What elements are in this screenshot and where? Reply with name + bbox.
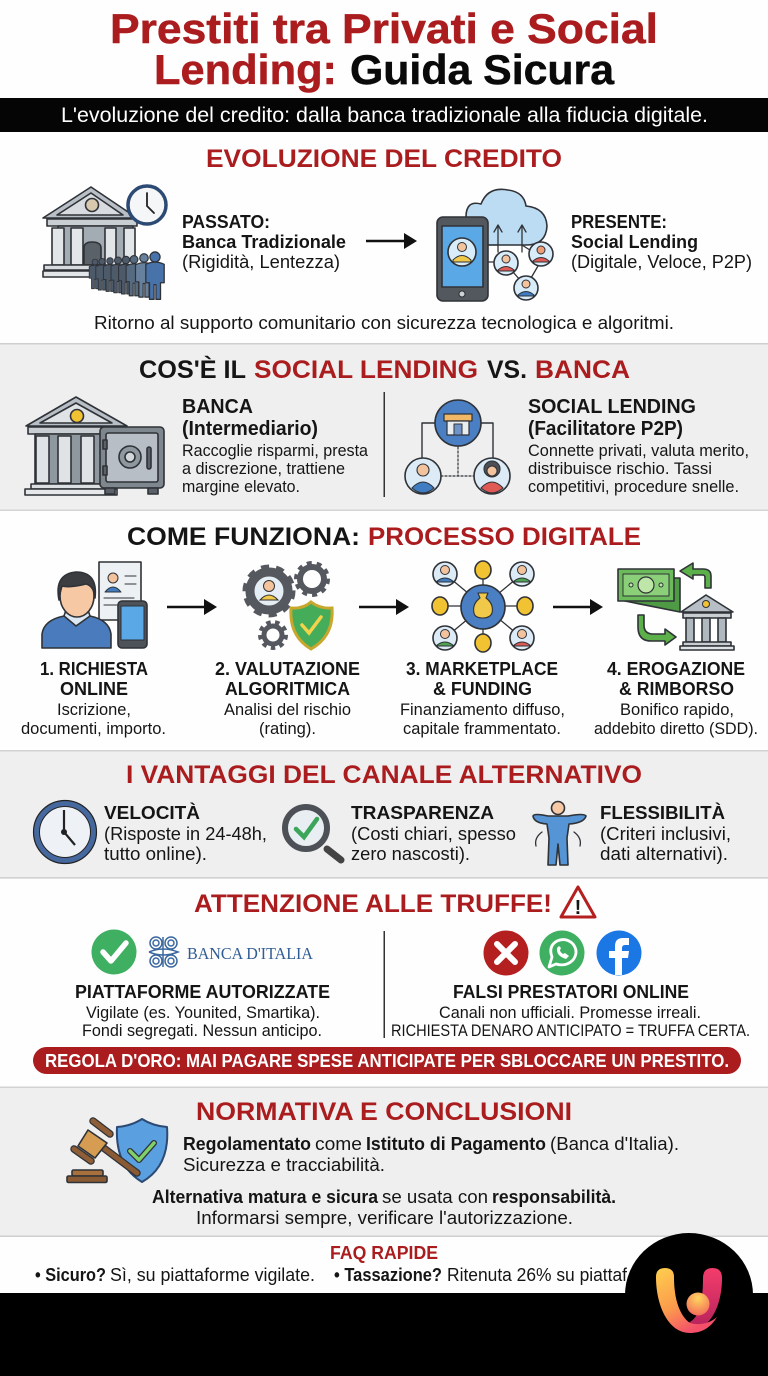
text: step 1: 1. RICHIESTA — [40, 659, 148, 679]
heading: cos'è: BANCA — [535, 356, 630, 384]
text: step 3: Finanziamento diffuso, — [400, 701, 565, 719]
watermark dome — [625, 1233, 753, 1295]
text: step 2: (rating). — [259, 720, 316, 738]
title: Prestiti tra Privati e Social — [110, 5, 658, 52]
text: alternativa matura: se usata con — [382, 1187, 488, 1207]
panel: normativa e conclusioni — [0, 1086, 768, 1237]
heading: processo digitale: COME FUNZIONA: — [127, 523, 360, 551]
text: trasparenza: (Costi chiari, spesso — [351, 824, 516, 844]
heading: cos'è — [139, 355, 630, 384]
text: piattaforme autorizzate: Fondi segregati. Nessun anticipo. — [82, 1022, 322, 1040]
text: regolamentato: come — [315, 1134, 362, 1154]
text: step 3 — [400, 659, 565, 738]
text: faq sicuro: Sì, su piattaforme vigilate. — [110, 1265, 315, 1285]
text: velocità: (Risposte in 24-48h, — [104, 824, 267, 844]
text: velocità: tutto online). — [104, 844, 207, 864]
icon: clock — [34, 800, 96, 864]
text: faq tassazione: • Tassazione? — [334, 1265, 442, 1285]
arrow: passato to presente — [366, 233, 417, 249]
text: falsi prestatori: FALSI PRESTATORI ONLINE — [453, 982, 689, 1002]
text: alternativa matura: responsabilità. — [492, 1187, 616, 1207]
text: faq tassazione: Ritenuta 26% su piattaf — [447, 1265, 628, 1285]
logo: banca d'italia: BANCA D'ITALIA — [187, 944, 314, 963]
heading: cos'è: VS. — [487, 356, 527, 384]
text: step 2 — [215, 659, 360, 738]
title: Guida Sicura — [350, 46, 615, 93]
text: piattaforme autorizzate: PIATTAFORME AUTORIZZATE — [75, 982, 330, 1002]
text: velocità: VELOCITÀ — [104, 802, 200, 823]
arrow: step 1 to 2 — [167, 599, 217, 615]
panel: vantaggi — [0, 750, 768, 879]
text: piattaforme autorizzate — [75, 982, 330, 1040]
text: trasparenza: zero nascosti). — [351, 844, 470, 864]
callout: regola d'oro: REGOLA D'ORO: MAI PAGARE SPESE ANTICIPATE PER SBLOCCARE UN PRESTITO. — [45, 1051, 729, 1071]
text: step 2: Analisi del rischio — [224, 701, 351, 719]
text: step 2: 2. VALUTAZIONE — [215, 659, 360, 679]
text: step 1 — [21, 659, 166, 738]
text: regolamentato: Istituto di Pagamento — [366, 1134, 546, 1154]
heading: faq: FAQ RAPIDE — [330, 1243, 438, 1263]
text: presente: Social Lending — [571, 232, 698, 252]
text: passato: PASSATO: — [182, 212, 270, 232]
text: flessibilità: (Criteri inclusivi, — [600, 824, 731, 844]
text: step 4: Bonifico rapido, — [620, 701, 734, 719]
black footer band — [0, 1293, 768, 1376]
text: faq sicuro: • Sicuro? — [35, 1265, 106, 1285]
icon: step 1 person with document and phone — [42, 562, 147, 648]
text: banca: (Intermediario) — [182, 418, 318, 440]
text: alternativa matura — [152, 1187, 616, 1228]
header — [0, 0, 768, 98]
icon: green check — [92, 930, 136, 974]
text: step 4 — [594, 659, 758, 738]
icon: traditional bank with clock and queue — [43, 186, 166, 299]
panel: evoluzione del credito — [0, 132, 768, 343]
text: banca: Raccoglie risparmi, presta — [182, 441, 369, 460]
text: banca — [182, 396, 369, 496]
text: social lending: Connette privati, valuta merito, — [528, 441, 749, 460]
icon: facebook — [596, 930, 642, 976]
text: velocità — [104, 802, 267, 864]
text: ritorno al supporto: Ritorno al supporto comunitario con sicurezza tecnologica e algoritmi. — [94, 313, 674, 333]
icon: warning triangle — [561, 887, 595, 919]
text: presente — [571, 212, 752, 272]
text: passato: (Rigidità, Lentezza) — [182, 252, 340, 272]
panel: faq rapide — [0, 1237, 768, 1293]
text: alternativa matura: Alternativa matura e sicura — [152, 1187, 379, 1207]
text: falsi prestatori — [391, 982, 750, 1040]
text: banca: margine elevato. — [182, 477, 300, 496]
panel: come funziona — [0, 511, 768, 750]
text: step 1: documenti, importo. — [21, 720, 166, 738]
text: falsi prestatori: Canali non ufficiali. Promesse irreali. — [439, 1004, 701, 1022]
text: social lending: distribuisce rischio. Tassi — [528, 459, 712, 478]
text: flessibilità: dati alternativi). — [600, 844, 728, 864]
text: step 2: ALGORITMICA — [225, 679, 350, 699]
heading: processo digitale — [127, 523, 641, 551]
text: step 1: Iscrizione, — [57, 701, 131, 719]
arrow: step 3 to 4 — [553, 599, 603, 615]
icon: gavel and shield — [67, 1119, 167, 1182]
text: flessibilità: FLESSIBILITÀ — [600, 802, 725, 823]
text: trasparenza — [351, 803, 516, 864]
text: alternativa matura: Informarsi sempre, verificare l'autorizzazione. — [196, 1208, 573, 1228]
text: social lending: SOCIAL LENDING — [528, 396, 696, 418]
text: regolamentato: Regolamentato — [183, 1134, 311, 1154]
divider — [384, 392, 385, 497]
icon: step 2 gears and shield — [245, 563, 332, 649]
text: social lending: (Facilitatore P2P) — [528, 418, 683, 440]
icon: phone, cloud and network — [437, 189, 553, 301]
text: presente: (Digitale, Veloce, P2P) — [571, 252, 752, 272]
text: social lending — [528, 396, 749, 496]
subtitle banner — [0, 98, 768, 132]
text: passato — [182, 212, 346, 272]
heading: cos'è: COS'È IL — [139, 355, 246, 384]
text: banca: a discrezione, trattiene — [182, 459, 345, 478]
icon: p2p facilitator network — [405, 400, 510, 494]
heading: vantaggi: I VANTAGGI DEL CANALE ALTERNATIVO — [126, 761, 642, 789]
text: presente: PRESENTE: — [571, 212, 667, 232]
title — [110, 5, 658, 93]
text: step 3: capitale frammentato. — [403, 720, 561, 738]
icon: step 3 marketplace network — [432, 561, 534, 652]
heading: cos'è: SOCIAL LENDING — [254, 356, 478, 384]
heading: evoluzione: EVOLUZIONE DEL CREDITO — [206, 145, 562, 173]
logo: watermark — [656, 1268, 722, 1333]
panel: attenzione alle truffe — [0, 879, 768, 1087]
text: regolamentato: (Banca d'Italia). — [550, 1134, 679, 1154]
title: Lending: — [154, 46, 337, 93]
text: passato: Banca Tradizionale — [182, 232, 346, 252]
text: social lending: competitivi, procedure snelle. — [528, 477, 739, 496]
text: step 4: & RIMBORSO — [619, 679, 734, 699]
text: piattaforme autorizzate: Vigilate (es. Younited, Smartika). — [86, 1004, 320, 1022]
text: step 3: 3. MARKETPLACE — [406, 659, 558, 679]
text: step 4: addebito diretto (SDD). — [594, 720, 758, 738]
text: regolamentato — [183, 1134, 679, 1175]
icon: flexible person — [533, 802, 586, 865]
icon: red cross — [484, 930, 528, 976]
text: regolamentato: Sicurezza e tracciabilità. — [183, 1155, 385, 1175]
heading: normativa: NORMATIVA E CONCLUSIONI — [196, 1098, 572, 1126]
text: step 4: 4. EROGAZIONE — [607, 659, 745, 679]
text: step 3: & FUNDING — [433, 679, 532, 699]
text: flessibilità — [600, 802, 731, 864]
text: trasparenza: TRASPARENZA — [351, 803, 494, 823]
icon: warning triangle: ! — [575, 897, 581, 919]
divider — [384, 931, 385, 1038]
arrow: step 2 to 3 — [359, 599, 409, 615]
icon: whatsapp — [540, 930, 584, 976]
text: step 1: ONLINE — [60, 679, 128, 699]
text: banca: BANCA — [182, 396, 253, 418]
heading: truffe: ATTENZIONE ALLE TRUFFE! — [194, 890, 552, 918]
logo: banca d'italia — [149, 937, 314, 967]
icon: step 4 money, arrows and bank — [618, 563, 734, 650]
subtitle banner: L'evoluzione del credito: dalla banca tradizionale alla fiducia digitale. — [61, 104, 708, 127]
text: faq tassazione — [334, 1265, 628, 1285]
icon: bank with safe — [25, 397, 164, 495]
panel: social lending vs banca — [0, 343, 768, 511]
icon: magnifier with check — [285, 807, 341, 860]
heading: processo digitale: PROCESSO DIGITALE — [368, 523, 641, 551]
